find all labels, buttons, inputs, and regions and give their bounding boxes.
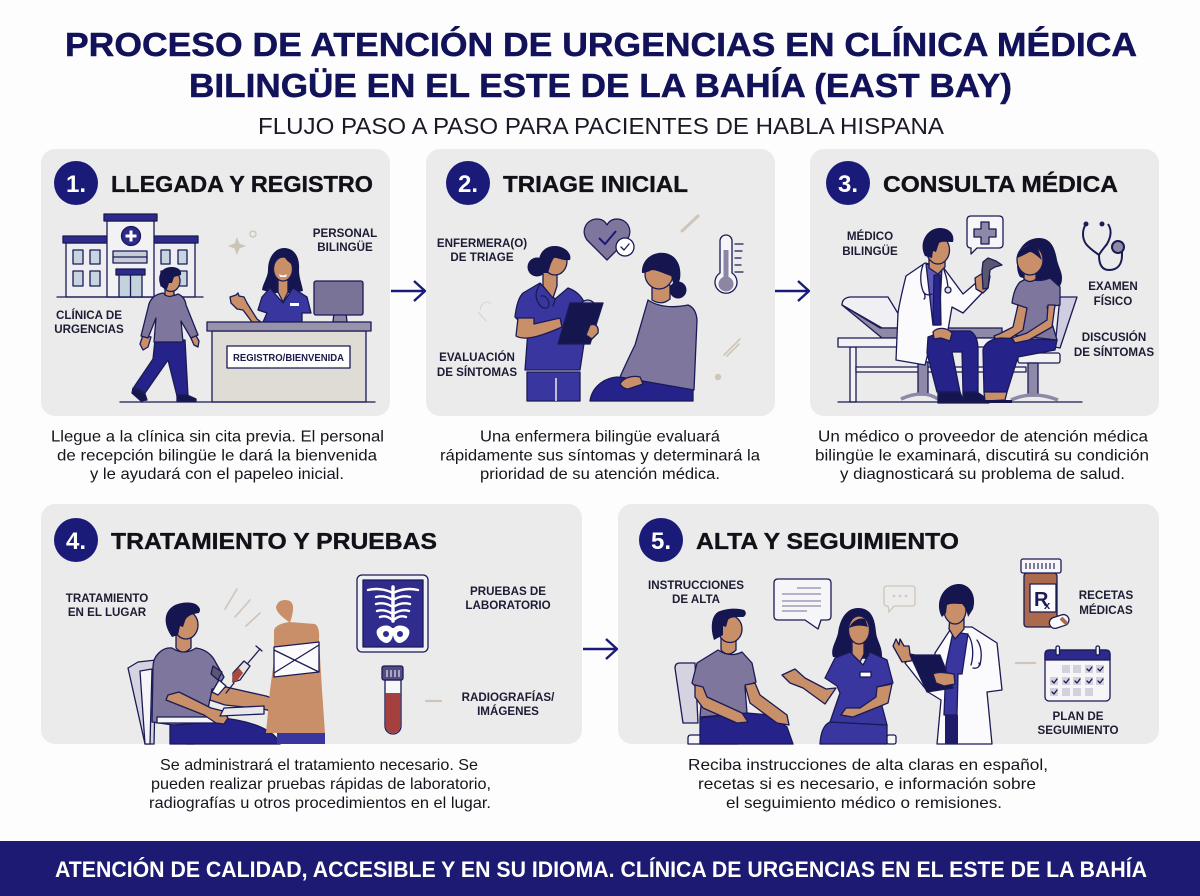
icon: computer monitor <box>314 281 363 322</box>
icon: sparkle <box>228 231 256 255</box>
label: discusión de síntomas: DE SÍNTOMAS <box>1074 346 1154 359</box>
arrow 2 to 3 <box>775 281 809 301</box>
icon: thermometer <box>715 235 743 293</box>
label: instrucciones de alta: INSTRUCCIONES <box>648 579 744 592</box>
figure: nurse <box>782 608 896 744</box>
label: radiografías / imágenes <box>462 691 555 718</box>
reception desk <box>207 322 371 402</box>
exam chairs <box>901 297 1077 400</box>
icon: follow-up calendar <box>1045 646 1110 701</box>
exam table <box>838 297 1082 402</box>
label: recetas médicas <box>1079 589 1134 617</box>
description 1 <box>51 428 384 483</box>
step heading 5: 5. <box>651 528 671 555</box>
step heading 3: CONSULTA MÉDICA <box>883 170 1118 197</box>
icon: prescription bottle: x <box>1044 600 1051 612</box>
label: evaluación de síntomas: DE SÍNTOMAS <box>437 366 517 379</box>
description 5 <box>688 757 1048 812</box>
figure: patient receiving treatment <box>152 602 282 744</box>
label: tratamiento en el lugar <box>66 592 148 619</box>
label: clínica de urgencias: URGENCIAS <box>54 323 124 336</box>
label: examen físico: FÍSICO <box>1094 295 1132 308</box>
label: recetas médicas: MÉDICAS <box>1079 604 1133 617</box>
step heading 1: LLEGADA Y REGISTRO <box>111 171 373 197</box>
panel 3: consulta médica <box>810 149 1159 416</box>
description 5: recetas si es necesario, e información sobre <box>698 776 1036 793</box>
step heading 3: 3. <box>838 171 858 198</box>
footer banner: ATENCIÓN DE CALIDAD, ACCESIBLE Y EN SU IDIOMA. CLÍNICA DE URGENCIAS EN EL ESTE DE LA BAHÍA <box>55 857 1147 882</box>
label: discusión de síntomas: DISCUSIÓN <box>1082 331 1146 344</box>
label: recetas médicas: RECETAS <box>1079 589 1134 602</box>
figure: seated patient <box>590 253 697 401</box>
arrow 4 to 5 <box>583 639 617 659</box>
description 4 <box>149 757 491 812</box>
figure: walking patient <box>132 267 199 401</box>
title: BILINGÜE EN EL ESTE DE LA BAHÍA (EAST BAY) <box>189 67 1012 105</box>
label: radiografías / imágenes: RADIOGRAFÍAS/ <box>462 691 555 704</box>
reception desk: REGISTRO/BIENVENIDA <box>233 352 344 364</box>
description 4: radiografías u otros procedimientos en el lugar. <box>149 795 491 812</box>
icon: heart with check <box>584 219 634 260</box>
label: plan de seguimiento <box>1038 710 1118 737</box>
description 3: bilingüe le examinará, discutirá su condición <box>815 448 1149 464</box>
figure: seated patient <box>675 609 793 744</box>
description 2: rápidamente sus síntomas y determinará la <box>440 448 760 464</box>
label: instrucciones de alta <box>648 579 744 606</box>
label: enfermera de triage <box>437 237 527 264</box>
figure: doctor with tablet <box>893 584 1002 744</box>
description 2: prioridad de su atención médica. <box>480 466 720 483</box>
title: PROCESO DE ATENCIÓN DE URGENCIAS EN CLÍNICA MÉDICA <box>65 26 1137 64</box>
label: personal bilingüe: PERSONAL <box>313 227 377 240</box>
icon: blood tube <box>382 666 403 734</box>
description 3: y diagnosticará su problema de salud. <box>840 466 1125 483</box>
label: discusión de síntomas <box>1074 331 1154 359</box>
description 4: Se administrará el tratamiento necesario. Se <box>160 757 478 774</box>
label: examen físico: EXAMEN <box>1088 280 1138 293</box>
icon: prescription bottle: R <box>1034 589 1049 611</box>
label: radiografías / imágenes: IMÁGENES <box>477 705 539 718</box>
icon: x-ray <box>357 575 428 652</box>
icon: otoscope <box>982 258 1002 289</box>
icon: stethoscope <box>1083 222 1124 270</box>
panel 2: triage inicial <box>426 149 775 416</box>
label: pruebas de laboratorio: PRUEBAS DE <box>470 585 546 598</box>
description 4: pueden realizar pruebas rápidas de laboratorio, <box>151 776 491 793</box>
panel 1: llegada y registro <box>41 149 390 416</box>
description 3: Un médico o proveedor de atención médica <box>818 428 1148 446</box>
step heading 4: 4. <box>66 528 86 555</box>
description 1: de recepción bilingüe le dará la bienvenida <box>57 448 377 464</box>
figure: seated patient <box>982 238 1062 403</box>
step heading 2 <box>446 161 688 205</box>
label: pruebas de laboratorio <box>465 585 551 612</box>
label: médico bilingüe <box>842 230 898 258</box>
icon: prescription bottle <box>1021 559 1070 630</box>
icon: clinic building <box>57 214 203 297</box>
icon: syringe <box>226 646 262 693</box>
label: enfermera de triage: DE TRIAGE <box>450 251 514 264</box>
label: evaluación de síntomas <box>437 351 517 379</box>
label: personal bilingüe <box>313 227 377 254</box>
step heading 4: TRATAMIENTO Y PRUEBAS <box>111 528 437 554</box>
description 5: el seguimiento médico o remisiones. <box>726 795 1002 812</box>
description 1: y le ayudará con el papeleo inicial. <box>90 466 344 483</box>
step heading 2: 2. <box>458 171 478 198</box>
arrow 1 to 2 <box>391 281 425 301</box>
title <box>65 26 1137 105</box>
label: examen físico <box>1088 280 1138 308</box>
speech bubble: small <box>884 586 915 612</box>
step heading 1 <box>54 161 373 205</box>
label: pruebas de laboratorio: LABORATORIO <box>465 599 551 612</box>
description 1: Llegue a la clínica sin cita previa. El personal <box>51 428 384 446</box>
label: clínica de urgencias <box>54 309 124 336</box>
figure: bilingual receptionist <box>230 248 311 322</box>
label: evaluación de síntomas: EVALUACIÓN <box>439 351 515 364</box>
label: instrucciones de alta: DE ALTA <box>672 593 721 606</box>
panel 5: alta y seguimiento <box>618 504 1159 744</box>
step heading 5 <box>639 518 959 562</box>
decorative marks <box>478 216 740 380</box>
label: personal bilingüe: BILINGÜE <box>317 241 373 254</box>
step heading 5: ALTA Y SEGUIMIENTO <box>696 528 959 554</box>
figure: bandaged torso <box>225 589 325 744</box>
figure: doctor <box>896 228 990 403</box>
description 2 <box>440 428 760 483</box>
label: tratamiento en el lugar: TRATAMIENTO <box>66 592 148 605</box>
label: plan de seguimiento: PLAN DE <box>1053 710 1104 723</box>
chair <box>128 660 194 744</box>
icon: speech bubble with cross <box>967 216 1003 254</box>
description 2: Una enfermera bilingüe evaluará <box>480 428 720 446</box>
step heading 3 <box>826 161 1118 205</box>
description 5: Reciba instrucciones de alta claras en español, <box>688 757 1048 774</box>
label: plan de seguimiento: SEGUIMIENTO <box>1038 724 1118 737</box>
speech bubble: instructions <box>774 579 831 629</box>
panel 4: tratamiento y pruebas <box>41 504 582 744</box>
step heading 4 <box>54 518 437 562</box>
figure: triage nurse <box>515 246 603 401</box>
step heading 1: 1. <box>66 171 86 198</box>
step heading 2: TRIAGE INICIAL <box>503 171 688 197</box>
label: médico bilingüe: MÉDICO <box>847 230 893 243</box>
label: clínica de urgencias: CLÍNICA DE <box>56 309 122 322</box>
label: tratamiento en el lugar: EN EL LUGAR <box>68 606 147 619</box>
subtitle: FLUJO PASO A PASO PARA PACIENTES DE HABLA HISPANA <box>258 113 944 139</box>
label: médico bilingüe: BILINGÜE <box>842 245 898 258</box>
footer banner <box>0 841 1200 896</box>
description 3 <box>815 428 1149 483</box>
label: enfermera de triage: ENFERMERA(O) <box>437 237 527 250</box>
